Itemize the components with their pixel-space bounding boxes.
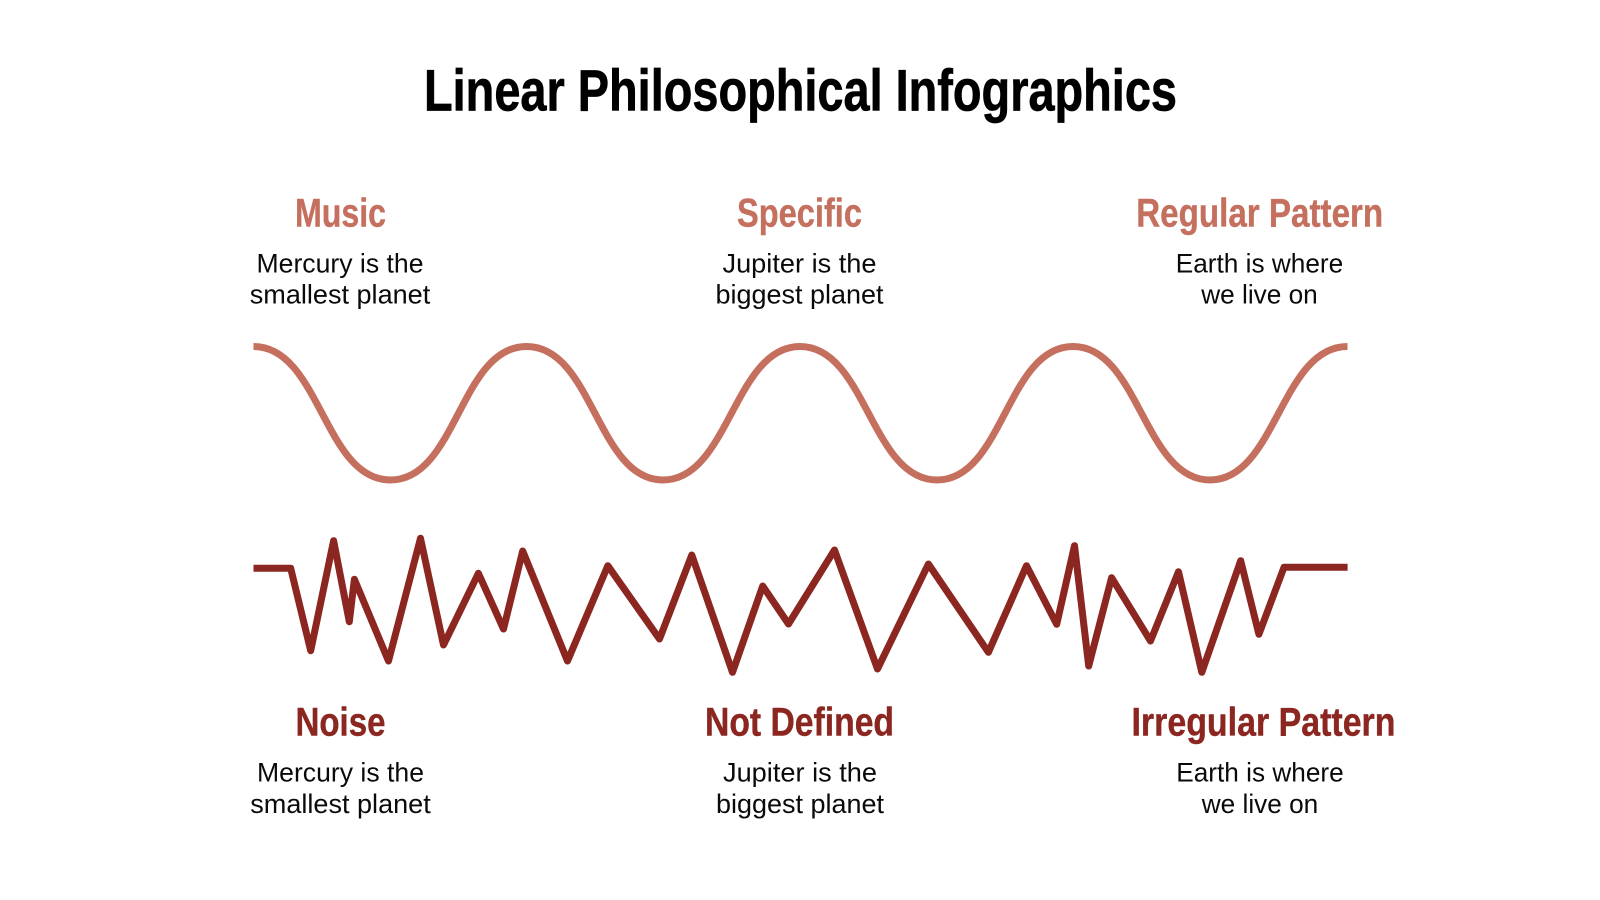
text: Noise description: smallest planet bbox=[250, 789, 431, 819]
panel: irregular pattern label bbox=[1132, 700, 1396, 819]
chart: jagged noise wave bbox=[254, 538, 1348, 672]
heading: Noise: Noise bbox=[296, 700, 386, 744]
panel: specific label bbox=[716, 192, 884, 310]
text: Not Defined description: biggest planet bbox=[716, 789, 885, 819]
text: Music description: Mercury is the bbox=[256, 248, 424, 278]
text: Music description: smallest planet bbox=[250, 280, 431, 310]
text: Regular Pattern description: we live on bbox=[1200, 280, 1318, 310]
heading: Music: Music bbox=[295, 192, 386, 236]
text: Irregular Pattern description: we live on bbox=[1201, 789, 1318, 819]
heading: Specific: Specific bbox=[737, 192, 862, 236]
text: Not Defined description: Jupiter is the bbox=[723, 758, 877, 788]
panel: music label bbox=[250, 192, 431, 310]
heading: Irregular Pattern: Irregular Pattern bbox=[1132, 700, 1396, 744]
text: Noise description: Mercury is the bbox=[257, 758, 424, 788]
chart: smooth sine wave bbox=[254, 346, 1348, 480]
text: Regular Pattern description: Earth is where bbox=[1176, 248, 1343, 278]
panel: noise label bbox=[250, 700, 431, 819]
heading: Not Defined: Not Defined bbox=[705, 700, 894, 744]
panel: regular pattern label bbox=[1136, 192, 1383, 310]
heading: Regular Pattern: Regular Pattern bbox=[1136, 192, 1383, 236]
title: Linear Philosophical Infographics bbox=[424, 59, 1177, 124]
panel: not defined label bbox=[705, 700, 894, 819]
text: Specific description: Jupiter is the bbox=[722, 248, 876, 278]
text: Irregular Pattern description: Earth is where bbox=[1176, 758, 1344, 788]
text: Specific description: biggest planet bbox=[716, 280, 884, 310]
